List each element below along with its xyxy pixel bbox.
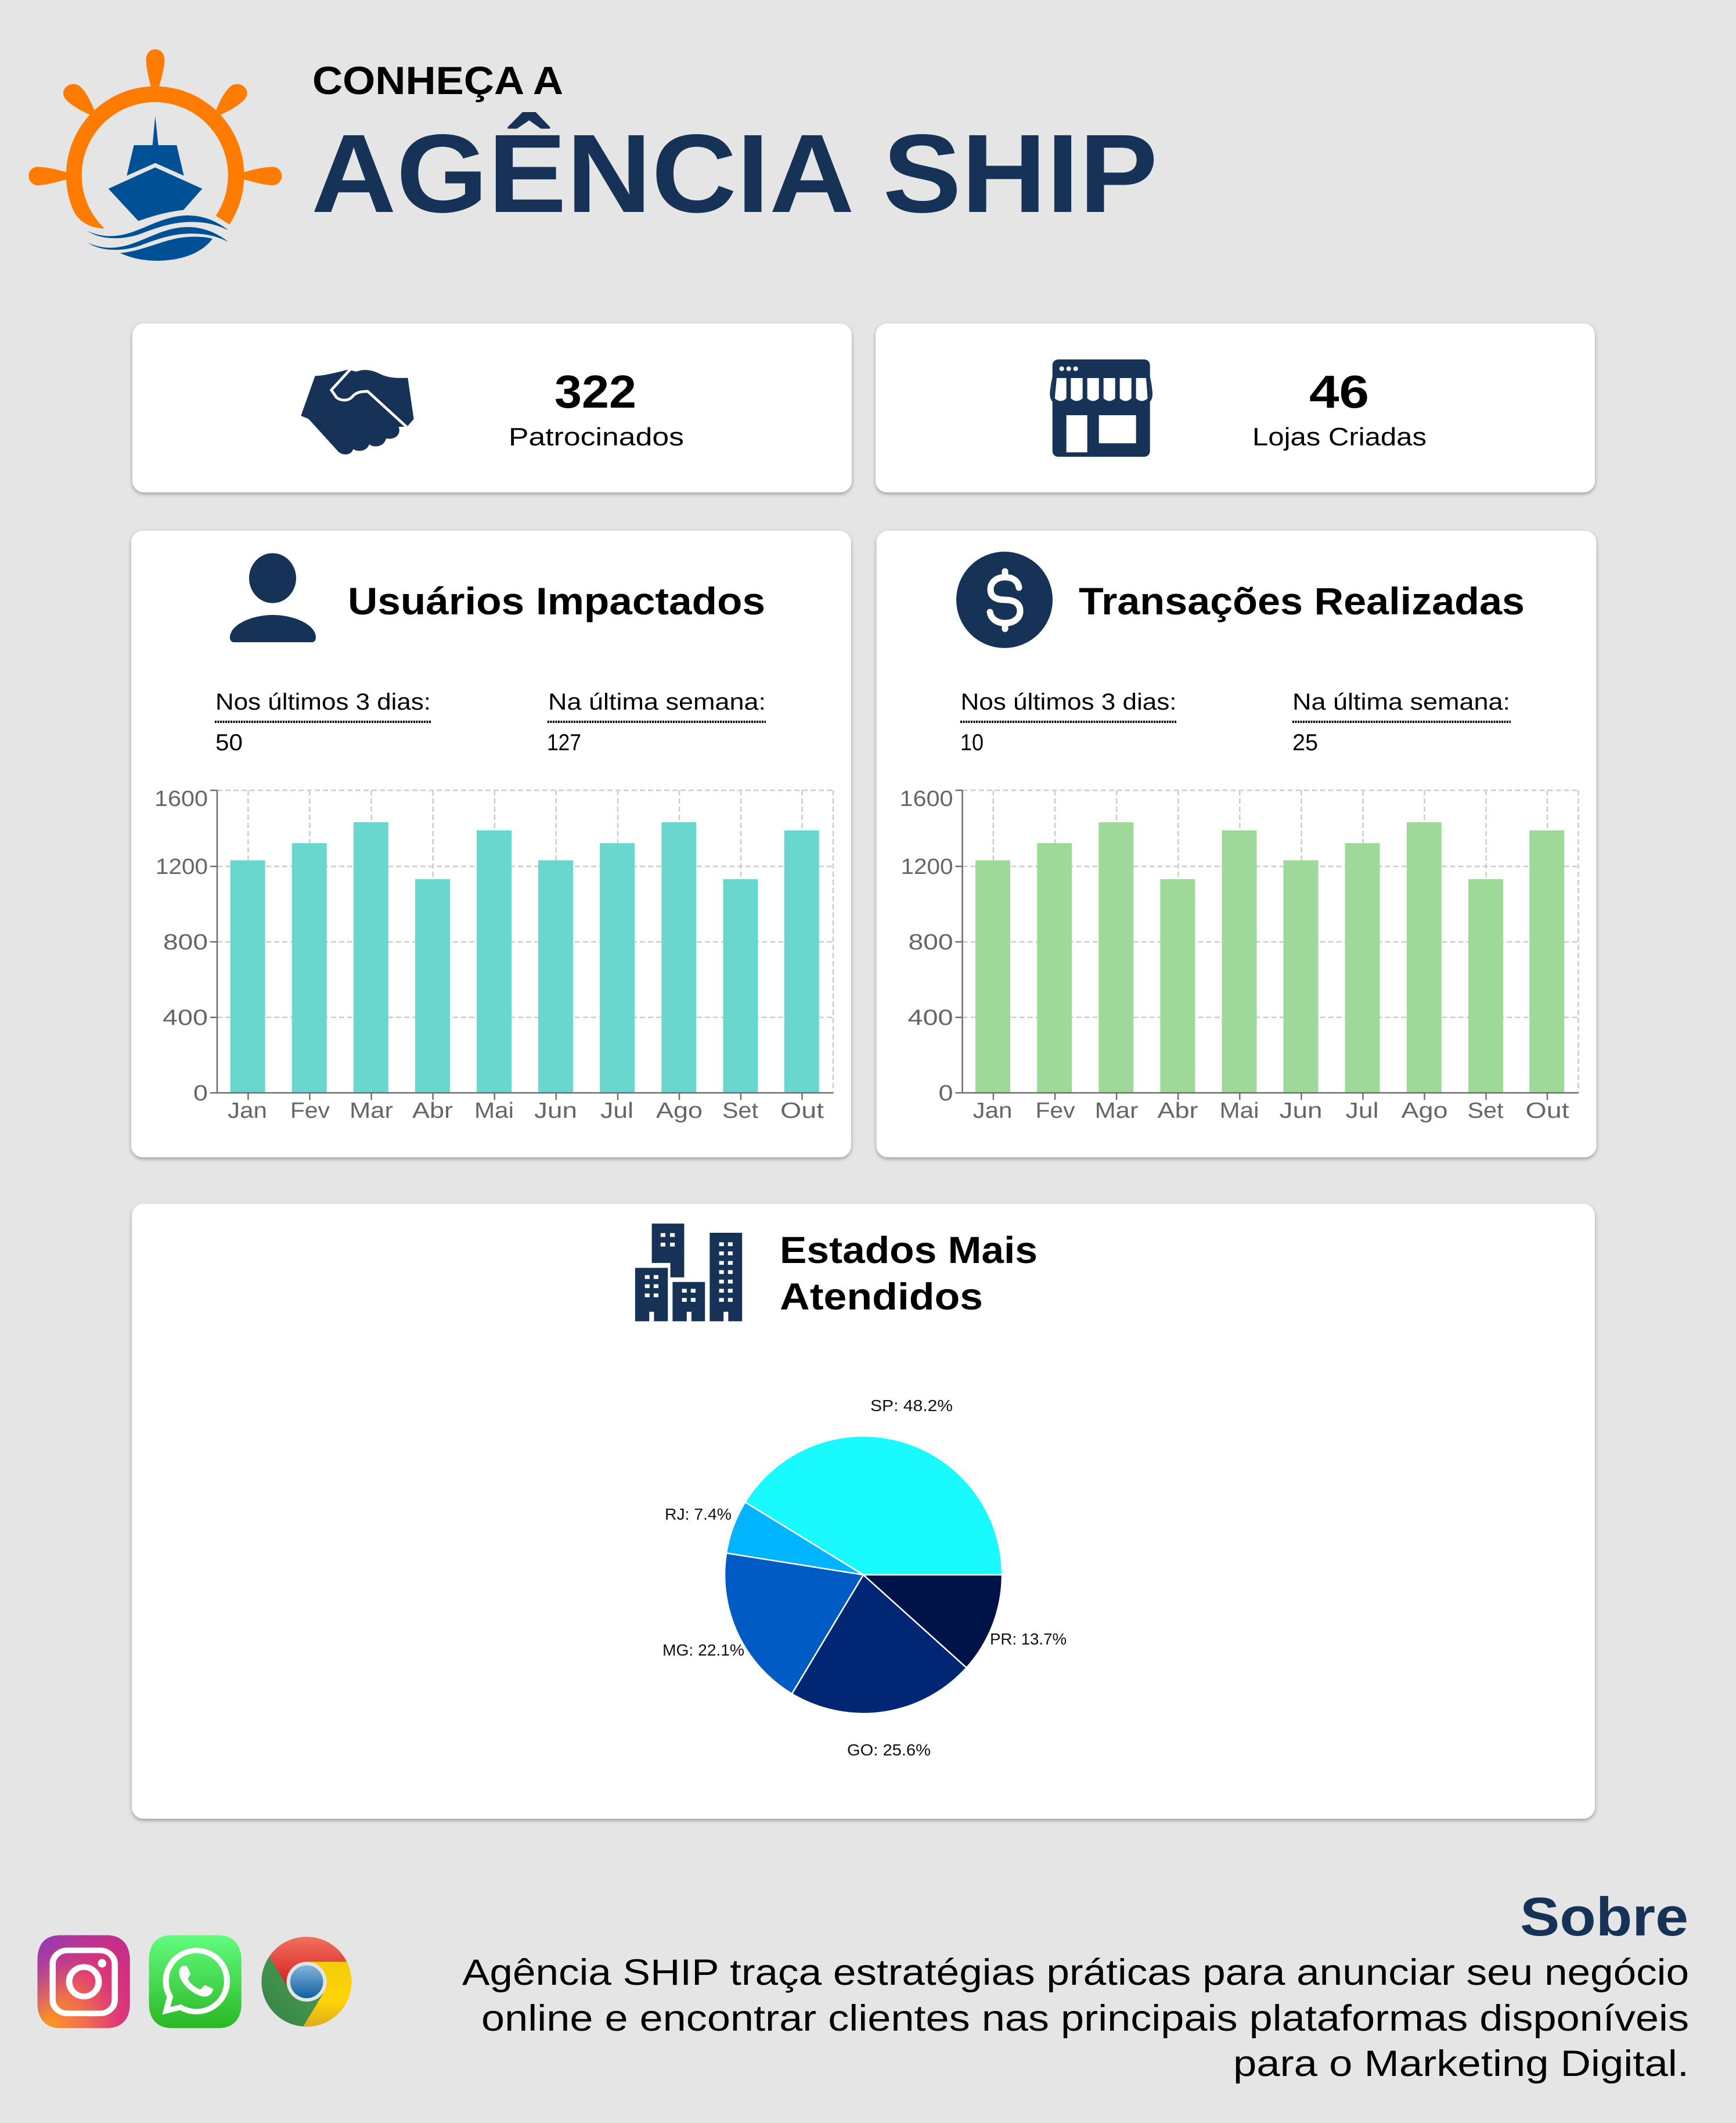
bar chart: transações: 400 — [908, 1006, 953, 1030]
bar chart: transações: Set — [1468, 1099, 1504, 1123]
bar chart: usuários: Set — [722, 1099, 758, 1123]
panel: lojas criadas — [876, 323, 1595, 492]
icon: chrome — [261, 1937, 351, 2027]
bar chart: usuários: Mar — [350, 1099, 393, 1123]
bar chart: transações: Out — [1526, 1099, 1569, 1123]
bar chart: usuários: Jun — [534, 1099, 577, 1123]
panel title: Estados Mais — [780, 1229, 1038, 1271]
stat value: 46: 46 — [1309, 366, 1369, 418]
bar chart: transações: Abr — [1158, 1099, 1198, 1123]
bar chart: usuários: 1200 — [156, 855, 208, 879]
metric: últimos 3 dias: Nos últimos 3 dias: — [215, 689, 431, 715]
metric: última semana: Na última semana: — [1292, 689, 1510, 715]
bar chart: transações: Mar — [1095, 1099, 1139, 1123]
bar chart: usuários: Mai — [474, 1099, 514, 1123]
text block: about: online e encontrar clientes nas principais plataformas disponíveis — [481, 1998, 1689, 2039]
icon: handshake — [301, 369, 414, 455]
bar chart: transações: 1200 — [901, 855, 953, 879]
bar chart: usuários: Jan — [228, 1099, 267, 1123]
panel title — [780, 1229, 1038, 1318]
metric: última semana: Na última semana: — [548, 689, 766, 715]
metric: última semana: 25 — [1292, 730, 1318, 755]
panel: usuários impactados — [131, 531, 851, 1157]
metric: últimos 3 dias — [960, 689, 1176, 755]
panel title: Usuários Impactados — [348, 580, 765, 622]
bar chart: transações: Jul — [1346, 1099, 1378, 1123]
metric: últimos 3 dias: 50 — [215, 730, 243, 755]
heading: sobre: Sobre — [1520, 1886, 1688, 1947]
text block: about: para o Marketing Digital. — [1233, 2043, 1689, 2084]
stat label: Patrocinados: Patrocinados — [509, 423, 684, 451]
panel: patrocinados — [132, 323, 852, 492]
metric: últimos 3 dias — [215, 689, 431, 755]
bar chart: usuários: Jul — [600, 1099, 633, 1123]
bar chart: transações: 0 — [938, 1081, 953, 1106]
pie chart: RJ: 7.4% — [665, 1505, 732, 1523]
bar chart: transações: 1600 — [900, 787, 953, 811]
heading: Agência Ship: AGÊNCIA SHIP — [311, 111, 1158, 236]
icon: dollar coin — [956, 552, 1053, 648]
panel: transações realizadas — [877, 531, 1597, 1157]
stat label: Lojas Criadas: Lojas Criadas — [1252, 423, 1427, 451]
bar chart: usuários: Fev — [290, 1099, 330, 1123]
bar chart: usuários: 0 — [193, 1081, 208, 1106]
text block: about: Agência SHIP traça estratégias práticas para anunciar seu negócio — [462, 1952, 1689, 1993]
panel: estados mais atendidos — [132, 1204, 1595, 1819]
pie chart: PR: 13.7% — [990, 1630, 1067, 1648]
icon: storefront — [1050, 359, 1152, 457]
bar chart: transações: Mai — [1219, 1099, 1259, 1123]
bar chart: transações: Jan — [973, 1099, 1013, 1123]
pie chart: SP: 48.2% — [870, 1397, 953, 1415]
bar chart: transações: Jun — [1280, 1099, 1323, 1123]
bar chart: usuários: 400 — [163, 1006, 208, 1030]
stat value: 322: 322 — [554, 366, 636, 418]
bar chart: transações: Fev — [1036, 1099, 1075, 1123]
icon: whatsapp — [149, 1935, 242, 2028]
metric: última semana — [547, 689, 766, 755]
bar chart: transações — [900, 787, 1578, 1123]
metric: últimos 3 dias: Nos últimos 3 dias: — [960, 689, 1176, 715]
text block: about — [462, 1952, 1689, 2084]
logo: ship wheel — [28, 49, 282, 261]
bar chart: transações: Ago — [1402, 1099, 1448, 1123]
bar chart: usuários: Ago — [656, 1099, 703, 1123]
bar chart: usuários: 1600 — [154, 787, 208, 811]
icon: user — [230, 553, 316, 642]
bar chart: usuários: Out — [780, 1099, 824, 1123]
bar chart: usuários: 800 — [163, 930, 208, 955]
bar chart: usuários — [154, 787, 833, 1123]
metric: últimos 3 dias: 10 — [960, 730, 984, 755]
panel title: Transações Realizadas — [1079, 580, 1525, 622]
pie chart — [662, 1397, 1067, 1759]
metric: última semana — [1292, 689, 1511, 755]
panel title: Atendidos — [780, 1275, 983, 1318]
bar chart: transações: 800 — [908, 930, 953, 955]
heading: Conheça a: CONHEÇA A — [312, 59, 563, 103]
icon: instagram — [38, 1935, 130, 2028]
metric: última semana: 127 — [547, 730, 581, 755]
pie chart: GO: 25.6% — [847, 1741, 931, 1759]
pie chart: MG: 22.1% — [662, 1641, 744, 1659]
icon: buildings — [635, 1224, 742, 1321]
bar chart: usuários: Abr — [412, 1099, 453, 1123]
